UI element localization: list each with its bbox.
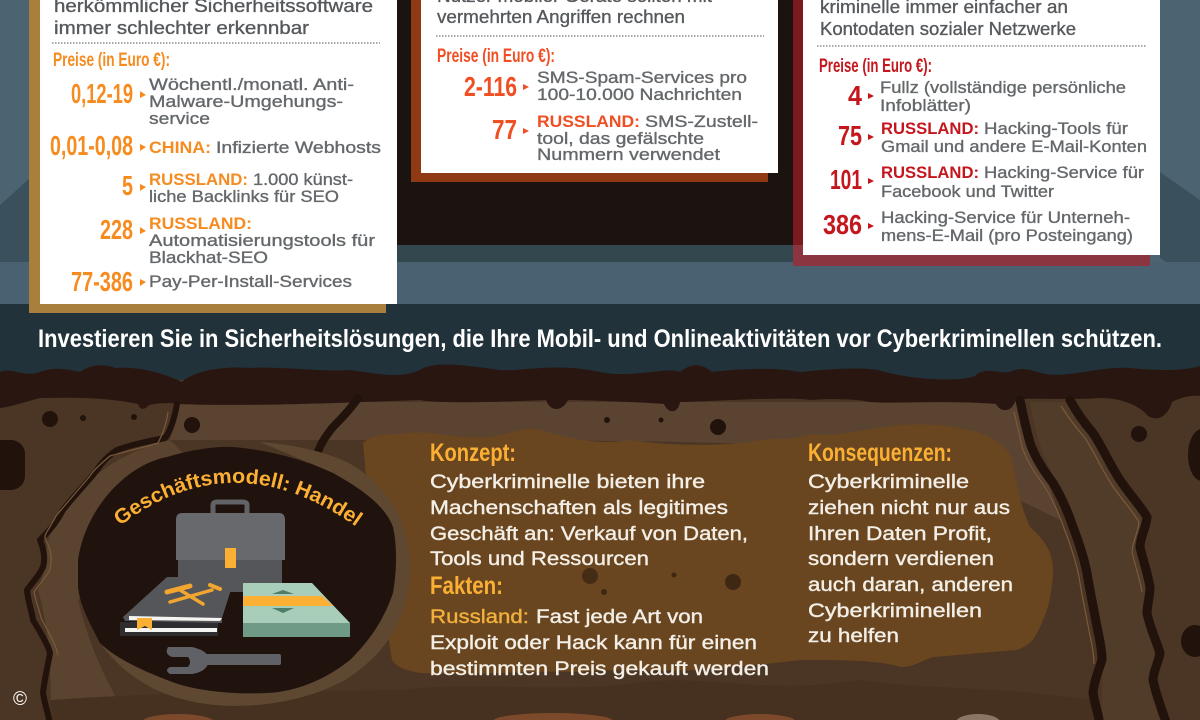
text block: concept [430,439,748,570]
card 2 price list: Nummern verwendet [537,145,720,164]
card 3 price list: RUSSLAND: [881,119,979,138]
copyright mark: © [13,689,27,710]
card 3 price list: 4 [848,80,862,111]
text blob: concept, facts and consequences [363,425,1053,674]
text block: consequences: Cyberkriminelle [808,472,969,493]
text block: concept: Cyberkriminelle bieten ihre [430,472,705,493]
card 3 price list: Fullz (vollständige persönliche [880,78,1126,97]
card 1 price list: liche Backlinks für SEO [149,187,339,206]
panel: card 3 social networks [793,0,1160,266]
card 3 price list: 75 [838,120,862,151]
panel: card 1 malware [29,0,397,313]
soil spots [0,411,1200,657]
cave rim [100,442,410,706]
text block: consequences: sondern verdienen [808,549,994,570]
card 1 price list: 77-386 [71,266,133,297]
text block: facts: bestimmten Preis gekauft werden [430,659,769,680]
banner background [0,304,1200,384]
card 3 price list: Infoblätter) [880,96,971,115]
card 3 price list: Gmail und andere E-Mail-Konten [881,137,1147,156]
card 2 price list: SMS-Zustell- [645,112,758,131]
text block: concept: Konzept: [430,439,516,467]
card 3 intro [820,0,1076,39]
card 1 price list: service [149,109,210,128]
text block: consequences: Ihren Daten Profit, [808,524,992,545]
icon: banknote stack [243,583,350,637]
text block: consequences [808,439,1013,647]
card 1 price list: 0,01-0,08 [50,130,133,161]
card 2 price list: SMS-Spam-Services pro [537,68,747,87]
card 1 intro: immer schlechter erkennbar [54,17,309,38]
card 2 price list: 77 [492,114,517,145]
card 3 intro: Kontodaten sozialer Netzwerke [820,18,1076,39]
card 1 price list: RUSSLAND: [149,170,248,189]
soil cracks [27,398,1167,720]
text block: consequences: ziehen nicht nur aus [808,498,1010,519]
card 2 price list: 100-10.000 Nachrichten [537,85,742,104]
card 2 intro [437,0,712,27]
card 1 prices heading: Preise (in Euro €): [53,49,170,71]
text block: facts: Exploit oder Hack kann für einen [430,633,757,654]
cave title: Geschäftsmodell: Handel [114,469,364,526]
text block: consequences: auch daran, anderen [808,575,1013,596]
card 3 price list [823,78,1147,245]
card 1 price list: Malware-Umgehungs- [149,92,343,111]
card 1 price list: 1.000 künst- [253,170,353,189]
card 1 price list: CHINA: [149,138,211,157]
card 1 price list: 0,12-19 [71,78,133,109]
card 3 price list: Hacking-Service für [984,163,1144,182]
card 3 price list: 386 [823,209,862,240]
card 1 price list: Pay-Per-Install-Services [149,272,352,291]
text block: facts: Russland: [430,607,529,628]
card 3 price list: Hacking-Tools für [984,119,1128,138]
card 2 price list: RUSSLAND: [537,112,640,131]
card 1 price list: Automatisierungstools für [149,231,375,250]
background: room walls and floor [0,0,1200,310]
text block: consequences: Konsequenzen: [808,439,952,467]
text block: facts: Fast jede Art von [536,607,703,628]
card 2 price list [464,68,758,164]
card 2 intro: vermehrten Angriffen rechnen [437,6,685,27]
card 1 price list: Wöchentl./monatl. Anti- [149,75,354,94]
text block: concept: Machenschaften als legitimes [430,498,728,519]
soil background [0,380,1200,720]
text block: concept: Tools und Ressourcen [430,549,649,570]
card 3 price list: Hacking-Service für Unterneh- [881,208,1130,227]
card 1 price list: Blackhat-SEO [149,248,268,267]
card 2 price list: 2-116 [464,71,517,102]
cave hole [78,447,396,693]
soil top dark layer [0,365,1200,418]
text block: concept: Geschäft an: Verkauf von Daten, [430,524,748,545]
card 2 price list: tool, das gefälschte [537,129,704,148]
icon: briefcase [176,502,285,592]
icon: wrench [167,647,281,674]
card 2 prices heading: Preise (in Euro €): [437,45,555,67]
text block: consequences: zu helfen [808,626,899,647]
text block: consequences: Cyberkriminellen [808,601,982,622]
card 3 price list: Facebook und Twitter [881,182,1054,201]
card 3 price list: 101 [830,164,862,195]
card 3 prices heading: Preise (in Euro €): [819,55,932,77]
card 1 price list [50,75,381,297]
panel: trade business model cave [78,442,410,706]
card 1 price list: 228 [100,214,133,245]
text block: facts [430,572,769,680]
card 1 price list: RUSSLAND: [149,214,252,233]
card 1 price list: 5 [122,170,133,201]
icon: tool books [120,577,235,636]
card 1 intro [54,0,373,38]
panel: card 2 mobile [411,0,778,182]
card 3 price list: RUSSLAND: [881,163,979,182]
card 3 price list: mens-E-Mail (pro Posteingang) [881,226,1133,245]
card 1 price list: Infizierte Webhosts [216,138,381,157]
text block: facts: Fakten: [430,572,503,600]
